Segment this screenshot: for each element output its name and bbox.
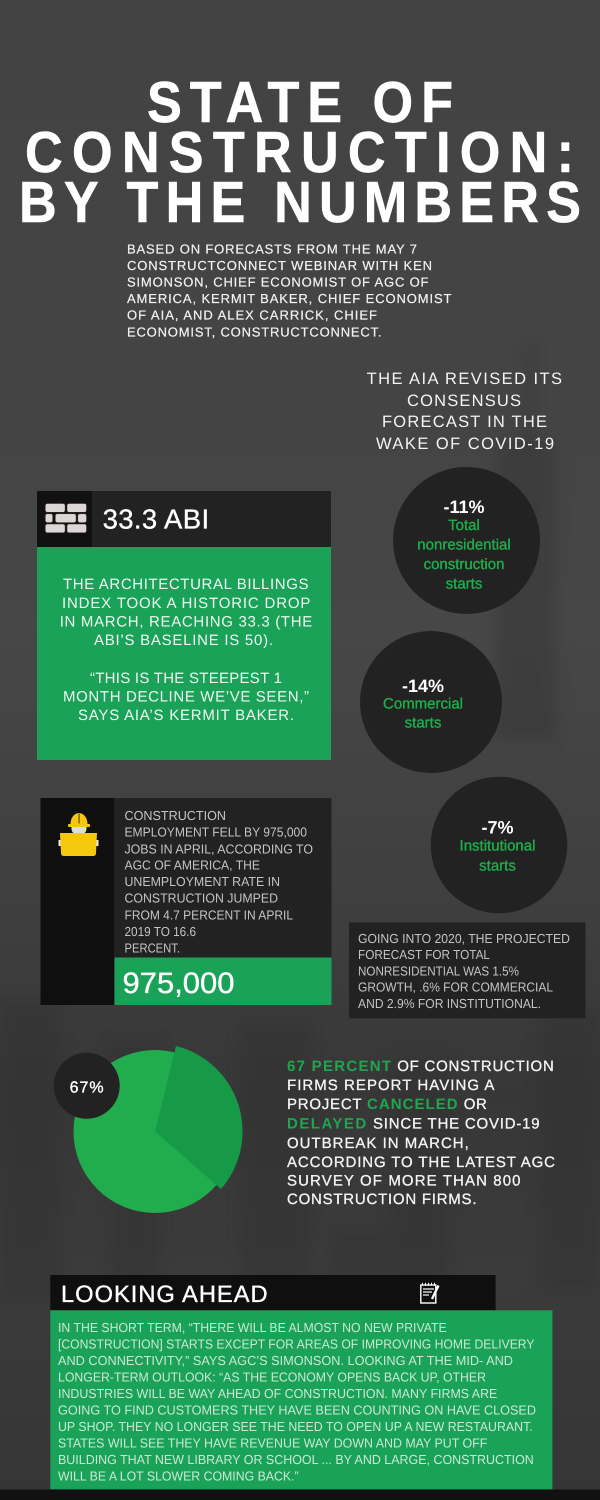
circle: total nonresidential: Total	[448, 517, 480, 534]
circle: total nonresidential	[393, 467, 540, 614]
looking ahead body text: STATES WILL SEE THEY HAVE REVENUE WAY DOWN AND MAY PUT OFF	[58, 1436, 487, 1450]
employment description: 2019 TO 16.6	[124, 924, 196, 939]
ABI description: SAYS AIA’S KERMIT BAKER.	[78, 707, 294, 724]
text: 67 percent of firms: PROJECT	[287, 1096, 362, 1113]
title	[19, 70, 581, 235]
circle: institutional: -7%	[481, 817, 514, 837]
pie label	[54, 1053, 120, 1119]
intro paragraph	[127, 242, 452, 339]
employment description: FROM 4.7 PERCENT IN APRIL	[124, 907, 293, 922]
panel: projected forecast: AND 2.9% FOR INSTITUTIONAL.	[358, 996, 541, 1011]
employment description: AGC OF AMERICA, THE	[124, 858, 260, 873]
circle: commercial: -14%	[402, 676, 444, 696]
panel: employment	[40, 798, 332, 1005]
circle: commercial	[360, 631, 502, 773]
looking ahead body text: UP SHOP. THEY NO LONGER SEE THE NEED TO OPEN UP A NEW RESTAURANT.	[58, 1419, 533, 1434]
pie label: 67%	[70, 1080, 104, 1096]
looking ahead body text: AND CONNECTIVITY,” SAYS AGC’S SIMONSON. LOOKING AT THE MID- AND	[58, 1353, 513, 1368]
ABI description: INDEX TOOK A HISTORIC DROP	[62, 595, 310, 612]
heading: AIA consensus forecast: THE AIA REVISED ITS	[367, 370, 562, 388]
intro paragraph: AMERICA, KERMIT BAKER, CHIEF ECONOMIST	[127, 291, 452, 306]
text: 67 percent of firms: ACCORDING TO THE LATEST AGC	[287, 1154, 555, 1171]
circle: institutional: Institutional	[460, 838, 535, 855]
text: 67 percent of firms: CONSTRUCTION FIRMS.	[287, 1191, 476, 1208]
title: BY THE NUMBERS	[19, 170, 581, 235]
panel: ABI	[37, 491, 331, 760]
ABI description: MONTH DECLINE WE’VE SEEN,”	[63, 688, 309, 706]
text: 67 percent of firms: OF CONSTRUCTION	[397, 1058, 554, 1075]
employment value: 975,000	[122, 967, 234, 1000]
circle: institutional: starts	[479, 858, 516, 875]
intro paragraph: SIMONSON, CHIEF ECONOMIST OF AGC OF	[127, 274, 429, 289]
text: 67 percent of firms: 67 PERCENT	[287, 1058, 391, 1075]
employment description: CONSTRUCTION JUMPED	[124, 891, 278, 906]
ABI description: IN MARCH, REACHING 33.3 (THE	[60, 614, 312, 630]
looking ahead heading: LOOKING AHEAD	[61, 1282, 268, 1308]
employment description: PERCENT.	[124, 941, 180, 956]
panel: projected forecast: FORECAST FOR TOTAL	[358, 947, 490, 962]
panel: projected forecast: GROWTH, .6% FOR COMMERCIAL	[358, 980, 553, 995]
circle: commercial: Commercial	[383, 695, 463, 712]
text: 67 percent of firms: OR	[464, 1096, 487, 1113]
employment description	[124, 808, 313, 956]
looking ahead body text: IN THE SHORT TERM, “THERE WILL BE ALMOST NO NEW PRIVATE	[58, 1320, 447, 1335]
ABI description: “THIS IS THE STEEPEST 1	[90, 670, 282, 687]
icon: brick wall	[45, 504, 86, 533]
looking ahead body text: WILL BE A LOT SLOWER COMING BACK.”	[58, 1468, 299, 1484]
icon: construction worker	[58, 813, 98, 856]
employment description: JOBS IN APRIL, ACCORDING TO	[124, 841, 313, 856]
circle: institutional	[431, 777, 567, 913]
intro paragraph: OF AIA, AND ALEX CARRICK, CHIEF	[127, 308, 377, 323]
looking ahead body text: GOING TO FIND CUSTOMERS THEY HAVE BEEN COUNTING ON HAVE CLOSED	[58, 1402, 536, 1418]
panel: looking ahead	[50, 1275, 552, 1489]
panel: projected forecast: NONRESIDENTIAL WAS 1.5%	[358, 963, 519, 978]
looking ahead body text: LONGER-TERM OUTLOOK: “AS THE ECONOMY OPENS BACK UP, OTHER	[58, 1370, 486, 1384]
panel: projected forecast: GOING INTO 2020, THE PROJECTED	[358, 931, 570, 946]
intro paragraph: CONSTRUCTCONNECT WEBINAR WITH KEN	[127, 258, 432, 273]
panel: projected forecast	[349, 922, 586, 1018]
looking ahead body text	[58, 1320, 536, 1484]
looking ahead body text: [CONSTRUCTION] STARTS EXCEPT FOR AREAS OF IMPROVING HOME DELIVERY	[58, 1336, 535, 1352]
icon: notepad and pencil	[421, 1283, 438, 1303]
circle: total nonresidential: starts	[446, 576, 482, 593]
heading: AIA consensus forecast: CONSENSUS	[407, 392, 521, 410]
ABI value: 33.3 ABI	[103, 504, 209, 534]
employment description: UNEMPLOYMENT RATE IN	[124, 874, 280, 889]
text: 67 percent of firms: SINCE THE COVID-19	[373, 1116, 540, 1132]
intro paragraph: BASED ON FORECASTS FROM THE MAY 7	[127, 242, 417, 257]
circle: commercial: starts	[405, 714, 441, 731]
ABI description	[60, 576, 312, 724]
text: 67 percent of firms: SURVEY OF MORE THAN 800	[287, 1172, 520, 1190]
text: 67 percent of firms: OUTBREAK IN MARCH,	[287, 1135, 469, 1152]
text: 67 percent of firms: DELAYED	[287, 1116, 366, 1132]
heading: AIA consensus forecast: WAKE OF COVID-19	[376, 435, 554, 453]
employment description: EMPLOYMENT FELL BY 975,000	[124, 825, 307, 840]
employment description: CONSTRUCTION	[124, 808, 226, 823]
circle: total nonresidential: nonresidential	[417, 537, 511, 554]
title: STATE OF	[147, 70, 453, 135]
circle: total nonresidential: construction	[424, 556, 504, 573]
intro paragraph: ECONOMIST, CONSTRUCTCONNECT.	[127, 324, 382, 339]
circle: total nonresidential: -11%	[443, 497, 485, 517]
pie chart: 67 percent	[54, 1046, 243, 1213]
looking ahead body text: BUILDING THAT NEW LIBRARY OR SCHOOL ... BY AND LARGE, CONSTRUCTION	[58, 1452, 534, 1467]
text: 67 percent of firms: CANCELED	[367, 1096, 458, 1113]
text: 67 percent of firms: FIRMS REPORT HAVING A	[287, 1077, 494, 1094]
ABI description: THE ARCHITECTURAL BILLINGS	[63, 576, 308, 593]
looking ahead body text: INDUSTRIES WILL BE WAY AHEAD OF CONSTRUCTION. MANY FIRMS ARE	[58, 1386, 498, 1401]
footer strip	[0, 1490, 600, 1500]
text: 67 percent of firms	[287, 1058, 555, 1208]
ABI description: ABI’S BASELINE IS 50).	[94, 632, 273, 649]
heading: AIA consensus forecast	[367, 370, 562, 453]
heading: AIA consensus forecast: FORECAST IN THE	[382, 413, 547, 431]
title: CONSTRUCTION:	[25, 120, 574, 185]
